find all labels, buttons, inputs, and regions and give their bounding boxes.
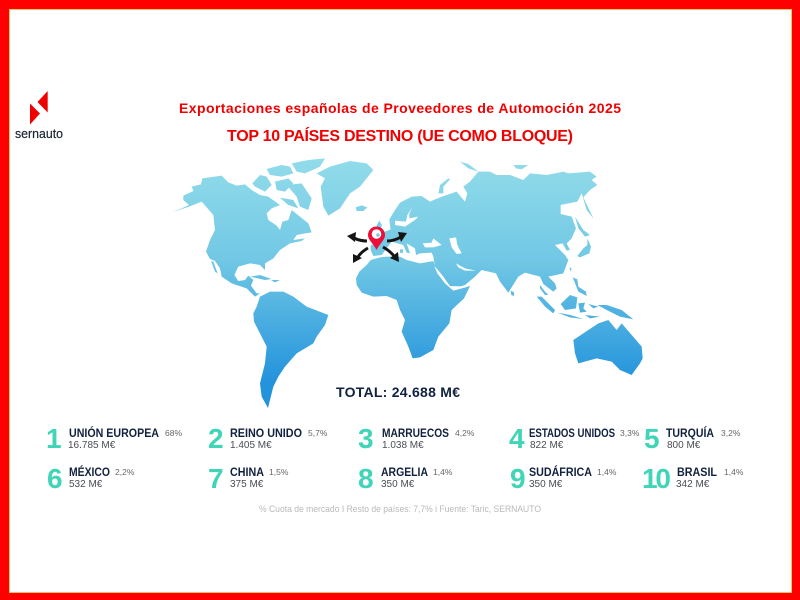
subtitle: TOP 10 PAÍSES DESTINO (UE COMO BLOQUE): [227, 126, 573, 145]
title: Exportaciones españolas de Proveedores de Automoción 2025: [179, 100, 621, 116]
item 4: ESTADOS UNIDOS: [529, 426, 615, 440]
item 2: 5,7%: [308, 428, 328, 438]
item 8: [358, 463, 453, 494]
item 8: 1,4%: [433, 467, 453, 477]
item 9: 1,4%: [597, 467, 617, 477]
item 2: REINO UNIDO: [230, 426, 302, 440]
item 1: 16.785 M€: [68, 440, 116, 451]
item 6: 532 M€: [69, 479, 103, 490]
item 7: [208, 463, 289, 494]
item 10: [642, 463, 744, 494]
item 10: BRASIL: [677, 465, 717, 479]
item 8: 8: [358, 463, 374, 494]
logo: sernauto: sernauto: [15, 127, 63, 141]
item 3: [358, 423, 475, 454]
footer source note: % Cuota de mercado I Resto de países: 7,7% i Fuente: Taric, SERNAUTO: [259, 504, 541, 515]
item 1: UNIÓN EUROPEA: [69, 425, 159, 440]
item 4: 822 M€: [530, 440, 564, 451]
item 9: 350 M€: [529, 479, 563, 490]
pin: [368, 226, 385, 250]
map: Africa and Eurasia: [356, 172, 597, 358]
map: Greenland, Iceland and South America: [253, 161, 373, 408]
item 2: 1.405 M€: [230, 440, 272, 451]
item 6: 2,2%: [115, 467, 135, 477]
item 2: [208, 423, 328, 454]
map: inland seas: [395, 207, 476, 291]
map: North America: [171, 158, 325, 297]
logo: sernauto: [15, 91, 63, 141]
total: TOTAL: 24.688 M€: [336, 384, 460, 400]
item 5: 5: [644, 423, 660, 454]
item 8: ARGELIA: [381, 465, 428, 479]
map: Australia and Svalbard: [460, 162, 643, 375]
item 7: CHINA: [230, 465, 264, 479]
item 6: 6: [47, 463, 63, 494]
item 5: 800 M€: [667, 440, 701, 451]
item 9: [510, 463, 617, 494]
item 7: 7: [208, 463, 224, 494]
item 9: SUDÁFRICA: [529, 464, 592, 479]
item 3: 4,2%: [455, 428, 475, 438]
item 4: 3,3%: [620, 428, 640, 438]
item 10: 1,4%: [724, 467, 744, 477]
item 1: 1: [46, 423, 62, 454]
item 3: MARRUECOS: [382, 426, 449, 440]
map: East Asian and Indonesian islands: [511, 165, 633, 319]
item 2: 2: [208, 423, 224, 454]
item 6: [47, 463, 135, 494]
item 7: 375 M€: [230, 479, 264, 490]
item 8: 350 M€: [381, 479, 415, 490]
icon: location pin with export arrows: [347, 226, 407, 263]
item 4: [509, 423, 640, 454]
item 1: [46, 423, 182, 454]
item 1: 68%: [165, 428, 182, 438]
item 7: 1,5%: [269, 467, 289, 477]
item 3: 3: [358, 423, 374, 454]
item 6: MÉXICO: [69, 464, 110, 479]
item 10: 10: [642, 463, 671, 494]
world map: [171, 158, 643, 408]
item 9: 9: [510, 463, 526, 494]
item 5: [644, 423, 741, 454]
item 5: 3,2%: [721, 428, 741, 438]
item 4: 4: [509, 423, 525, 454]
arrows: [347, 232, 407, 263]
item 3: 1.038 M€: [382, 440, 424, 451]
item 10: 342 M€: [676, 479, 710, 490]
item 5: TURQUÍA: [666, 425, 714, 440]
